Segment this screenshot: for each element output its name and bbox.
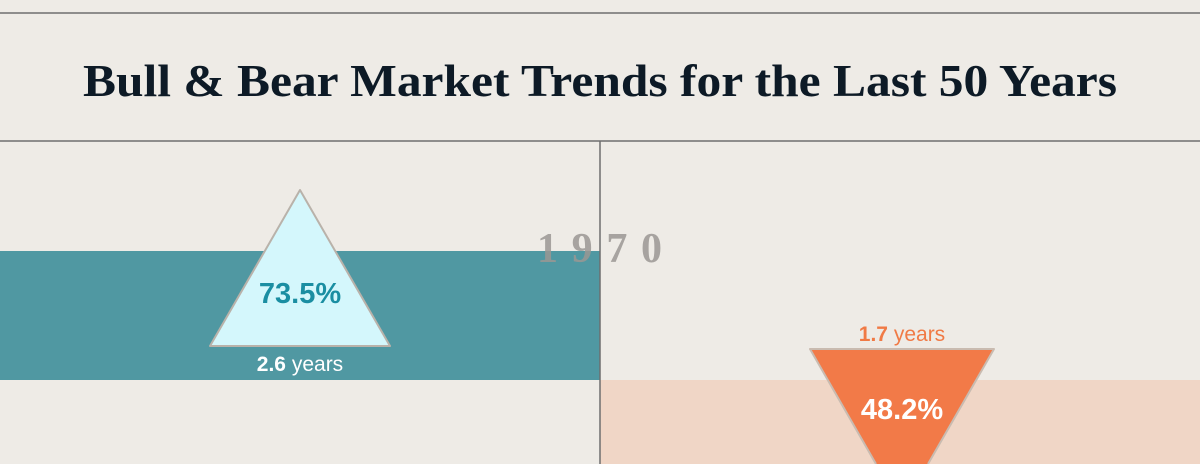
bear bar bbox=[600, 380, 1200, 464]
bear triangle bbox=[810, 349, 994, 464]
bull triangle bbox=[210, 190, 390, 346]
bull bar bbox=[0, 251, 600, 380]
bear triangle: 48.2% bbox=[861, 394, 943, 426]
title: Bull & Bear Market Trends for the Last 50 Years bbox=[83, 55, 1117, 106]
bull duration: 2.6 years bbox=[257, 353, 343, 376]
bull triangle: 73.5% bbox=[259, 278, 341, 310]
year label: 1970 bbox=[537, 226, 662, 272]
bear duration: 1.7 years bbox=[859, 323, 945, 346]
